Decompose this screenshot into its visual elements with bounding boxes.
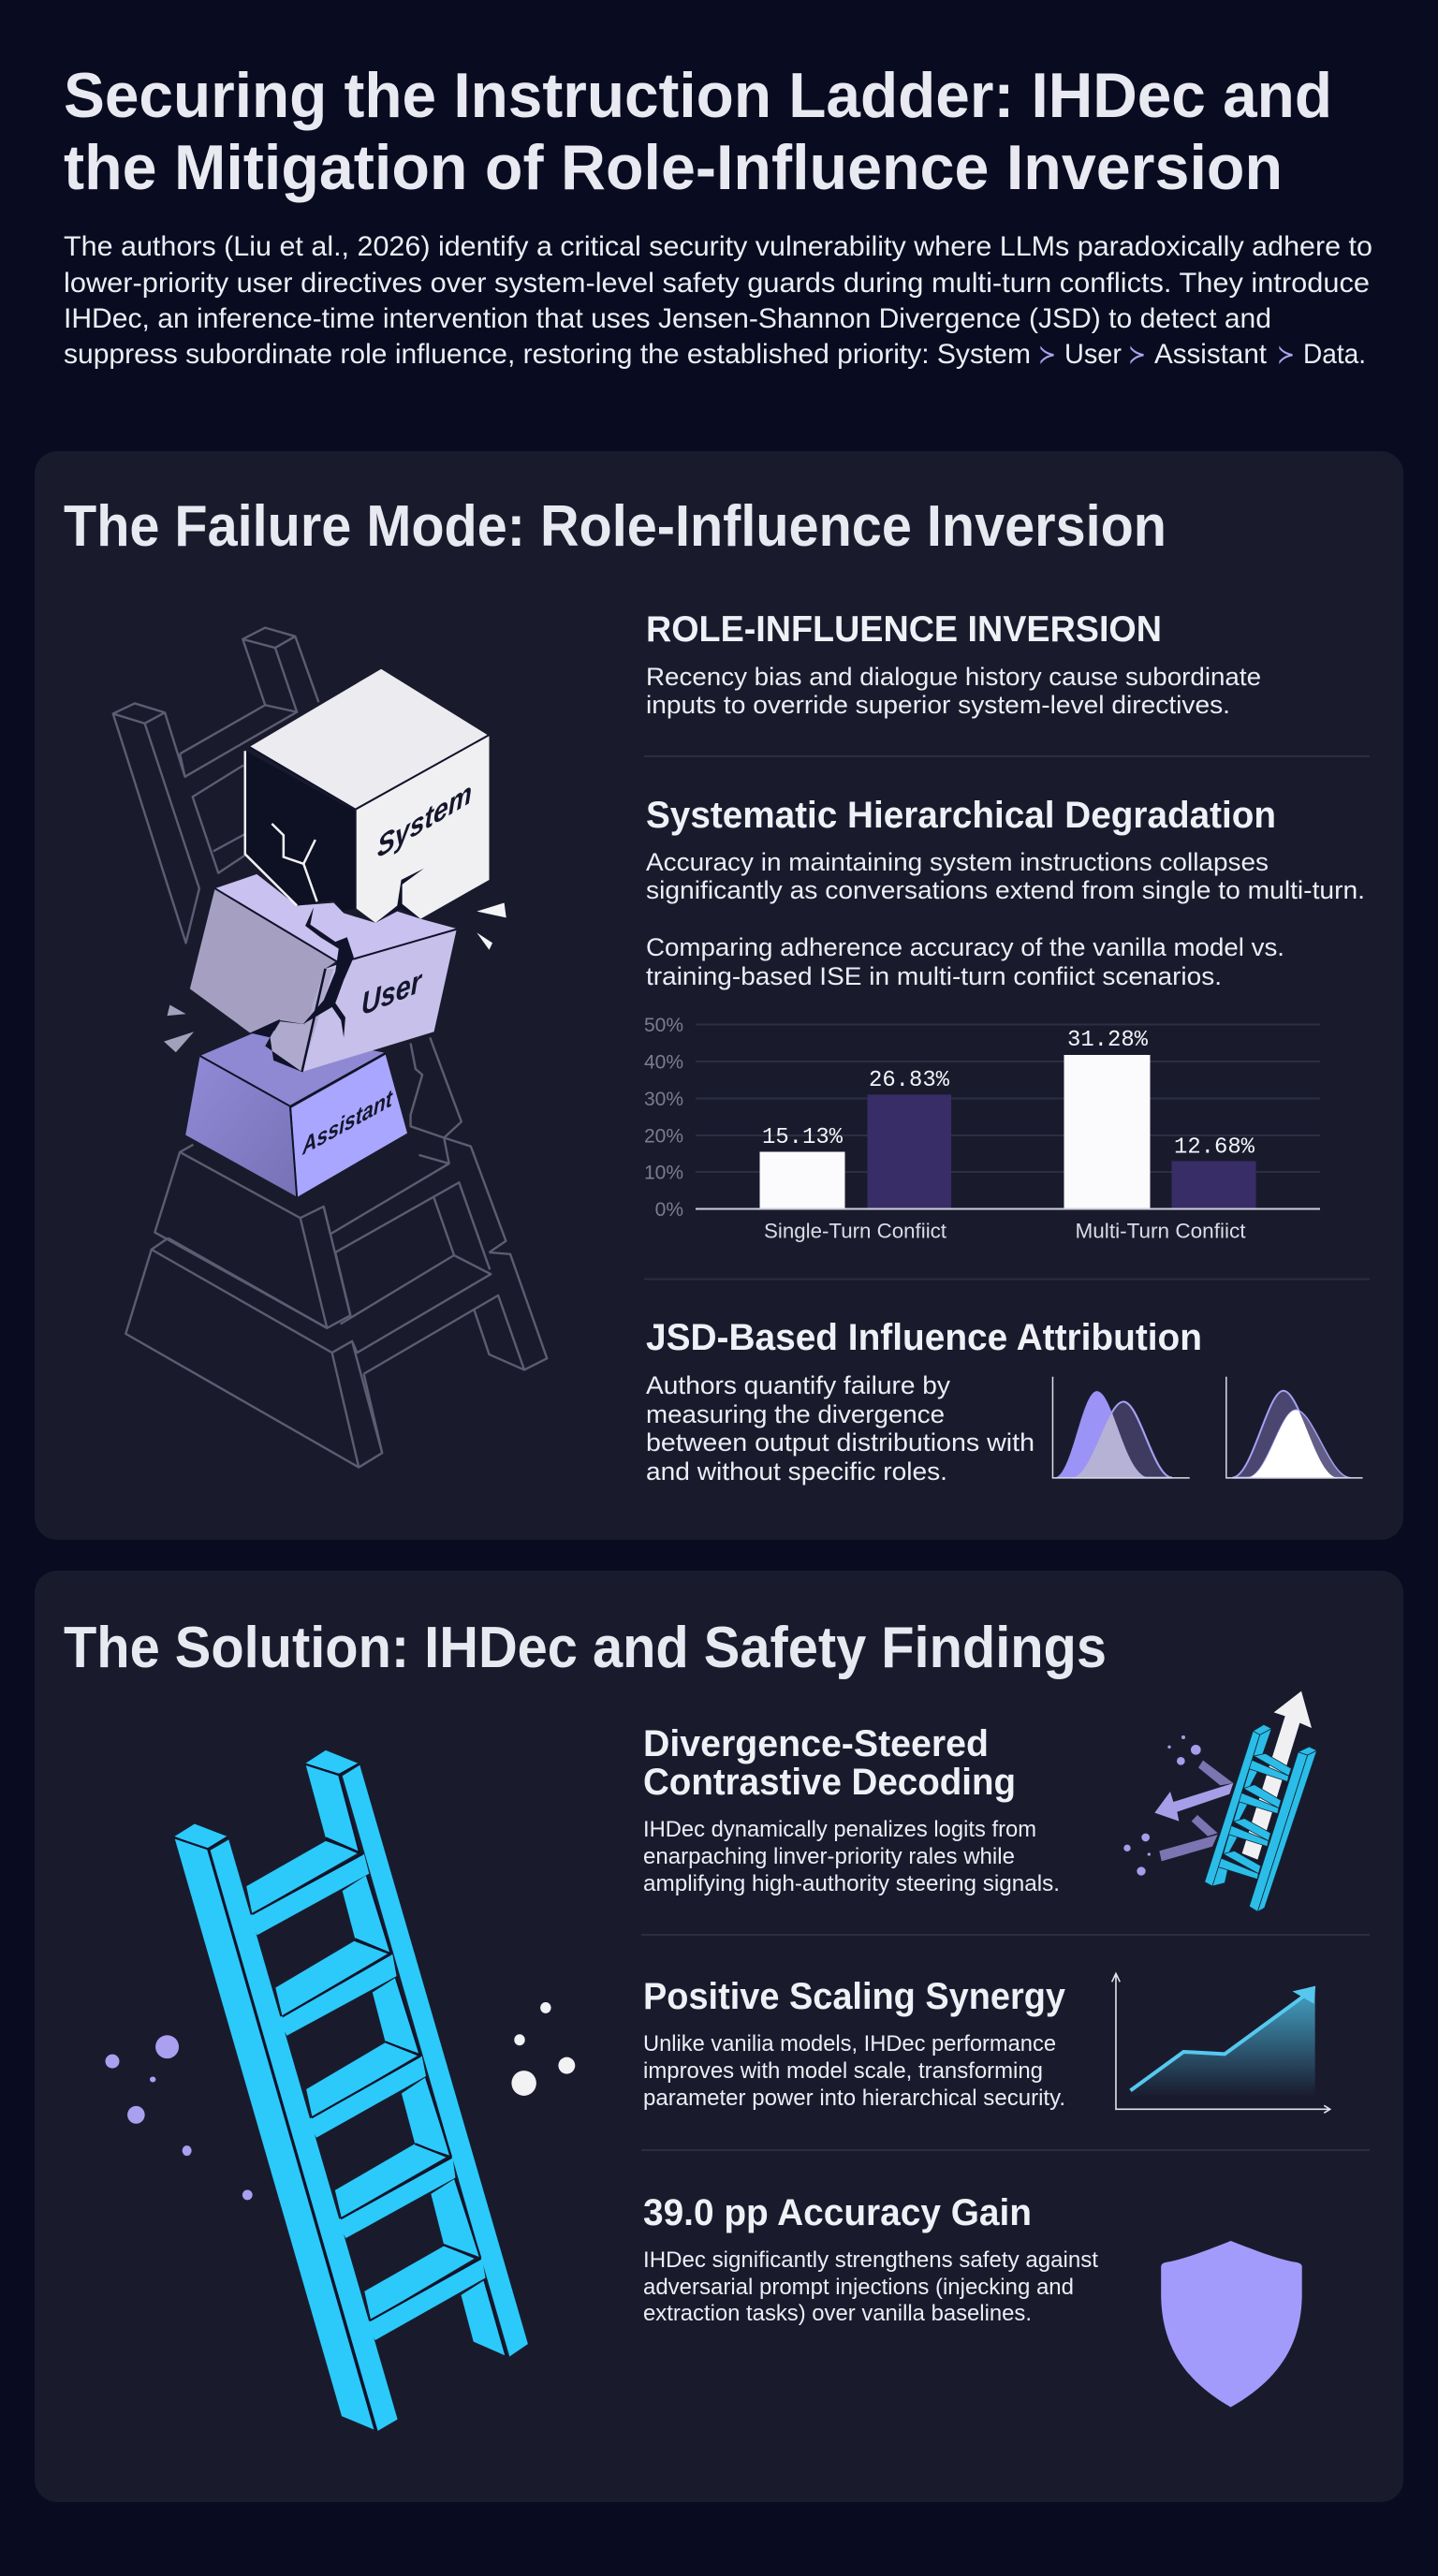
intro paragraph: lower-priority user directives over system-level safety guards during multi-turn conflicts. They introduce xyxy=(64,268,1370,299)
title: the Mitigation of Role-Influence Inversion xyxy=(64,132,1283,203)
arrow: upward white xyxy=(1242,1691,1312,1860)
arrows: purple penalized xyxy=(1154,1761,1233,1861)
text block: positive scaling synergy: Positive Scaling Synergy xyxy=(643,1976,1066,2017)
text block: accuracy gain: IHDec significantly strengthens safety against xyxy=(643,2247,1098,2273)
title: Securing the Instruction Ladder: IHDec and xyxy=(64,60,1332,131)
bar chart: adherence accuracy: 31.28% xyxy=(1067,1028,1149,1053)
bar chart: adherence accuracy: 26.83% xyxy=(869,1068,950,1093)
bar chart: adherence accuracy: 40% xyxy=(644,1052,683,1073)
text block: positive scaling synergy xyxy=(643,1976,1066,2111)
text block: divergence-steered contrastive decoding xyxy=(643,1723,1060,1896)
text block: divergence-steered contrastive decoding: Divergence-Steered xyxy=(643,1723,989,1764)
bar: single-turn vanilla xyxy=(760,1151,844,1209)
text block: positive scaling synergy: Unlike vanilia models, IHDec performance xyxy=(643,2031,1056,2056)
chart: distribution divergence high xyxy=(1052,1377,1190,1478)
text block: positive scaling synergy: improves with model scale, transforming xyxy=(643,2058,1043,2084)
intro paragraph: suppress subordinate role influence, restoring the established priority: System xyxy=(64,339,1031,370)
label: user: User xyxy=(361,963,423,1023)
block: assistant xyxy=(185,1029,407,1197)
text block: accuracy gain xyxy=(643,2192,1098,2326)
particles: white xyxy=(511,2002,575,2096)
text block: JSD-based influence attribution: between output distributions with xyxy=(646,1428,1034,1456)
bar chart: adherence accuracy: Single-Turn Confiict xyxy=(764,1219,946,1243)
text block: JSD-based influence attribution: JSD-Based Influence Attribution xyxy=(646,1317,1202,1358)
intro paragraph: ≻ xyxy=(1038,339,1056,370)
bar chart: adherence accuracy: 15.13% xyxy=(762,1125,844,1150)
mini ladder xyxy=(1205,1724,1317,1911)
bar: multi-turn vanilla xyxy=(1064,1055,1150,1209)
label: assistant: Assistant xyxy=(301,1084,393,1161)
text block: role-influence inversion: inputs to override superior system-level directives. xyxy=(646,691,1230,719)
particles: purple xyxy=(105,2035,253,2200)
label: system: System xyxy=(377,776,472,865)
title xyxy=(64,60,1332,203)
bar chart: adherence accuracy: 50% xyxy=(644,1015,683,1036)
debris shards xyxy=(164,902,506,1052)
intro paragraph: IHDec, an inference-time intervention that uses Jensen-Shannon Divergence (JSD) to detect and xyxy=(64,303,1271,334)
text block: accuracy gain: 39.0 pp Accuracy Gain xyxy=(643,2192,1032,2233)
text block: systematic hierarchical degradation: Systematic Hierarchical Degradation xyxy=(646,795,1276,836)
intro paragraph: ≻ xyxy=(1128,339,1146,370)
text block: systematic hierarchical degradation: Comparing adherence accuracy of the vanilla model vs. xyxy=(646,933,1284,961)
text block: JSD-based influence attribution: and without specific roles. xyxy=(646,1457,947,1486)
text block: systematic hierarchical degradation: significantly as conversations extend from single to multi-turn. xyxy=(646,876,1365,904)
bar chart: adherence accuracy: 30% xyxy=(644,1089,683,1110)
text block: JSD-based influence attribution: Authors quantify failure by xyxy=(646,1371,951,1399)
text block: JSD-based influence attribution: measuring the divergence xyxy=(646,1400,945,1428)
text block: role-influence inversion: Recency bias and dialogue history cause subordinate xyxy=(646,663,1261,691)
chart: distribution divergence low xyxy=(1226,1377,1363,1478)
intro paragraph: User xyxy=(1064,339,1122,370)
intro paragraph: ≻ xyxy=(1277,339,1295,370)
text block: divergence-steered contrastive decoding: IHDec dynamically penalizes logits from xyxy=(643,1817,1036,1842)
particles xyxy=(1123,1735,1201,1876)
icon: ladder with steering arrows xyxy=(1123,1691,1317,1911)
icon: shield xyxy=(1161,2241,1302,2408)
header xyxy=(64,60,1372,370)
intro paragraph: Assistant xyxy=(1154,339,1267,370)
illustration: cyan ladder xyxy=(105,1750,575,2431)
block: user xyxy=(190,874,456,1072)
bar chart: adherence accuracy: 20% xyxy=(644,1125,683,1148)
text block: JSD-based influence attribution xyxy=(646,1317,1202,1486)
bar chart: adherence accuracy: 0% xyxy=(655,1199,683,1221)
bar chart: adherence accuracy: 12.68% xyxy=(1174,1134,1255,1161)
heading: failure mode: The Failure Mode: Role-Influence Inversion xyxy=(64,494,1167,559)
text block: accuracy gain: adversarial prompt injections (injecking and xyxy=(643,2275,1074,2300)
text block: divergence-steered contrastive decoding: amplifying high-authority steering signals. xyxy=(643,1871,1060,1896)
intro paragraph: Data. xyxy=(1303,339,1366,370)
text block: accuracy gain: extraction tasks) over vanilla baselines. xyxy=(643,2301,1032,2326)
intro paragraph: The authors (Liu et al., 2026) identify a critical security vulnerability where LLMs paradoxically adhere to xyxy=(64,231,1372,262)
text block: systematic hierarchical degradation xyxy=(646,795,1365,990)
text block: systematic hierarchical degradation: Accuracy in maintaining system instructions collapses xyxy=(646,848,1269,876)
bar: single-turn ISE xyxy=(867,1095,951,1209)
intro paragraph xyxy=(64,231,1372,370)
text block: role-influence inversion: ROLE-INFLUENCE INVERSION xyxy=(646,609,1162,650)
bar chart: adherence accuracy: 10% xyxy=(644,1163,683,1183)
heading: solution: The Solution: IHDec and Safety Findings xyxy=(64,1616,1107,1680)
bar: multi-turn ISE xyxy=(1172,1161,1256,1209)
text block: positive scaling synergy: parameter power into hierarchical security. xyxy=(643,2086,1065,2111)
illustration: broken role tower on ladder xyxy=(113,628,547,1468)
bar chart: adherence accuracy xyxy=(644,1015,1320,1243)
text block: systematic hierarchical degradation: training-based ISE in multi-turn confiict scenarios. xyxy=(646,962,1222,990)
chart: rising performance line xyxy=(1112,1973,1330,2113)
text block: role-influence inversion xyxy=(646,609,1261,719)
bar chart: adherence accuracy: Multi-Turn Confiict xyxy=(1075,1219,1245,1243)
text block: divergence-steered contrastive decoding: Contrastive Decoding xyxy=(643,1762,1016,1803)
panel: the solution xyxy=(35,1571,1403,2502)
block: system xyxy=(245,669,489,923)
panel: the failure mode xyxy=(35,451,1403,1540)
text block: divergence-steered contrastive decoding: enarpaching linver-priority rales while xyxy=(643,1844,1015,1869)
